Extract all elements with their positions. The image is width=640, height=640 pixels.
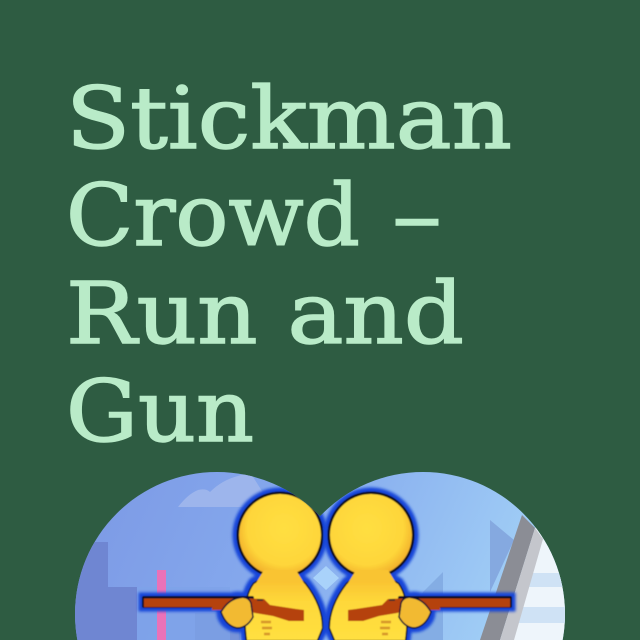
outline of head and body xyxy=(238,493,322,640)
fingers xyxy=(261,622,272,634)
sky xyxy=(70,470,570,640)
figure: right xyxy=(328,492,512,640)
neck xyxy=(256,570,304,583)
neck, right xyxy=(348,570,396,583)
figure: left xyxy=(142,492,324,640)
grey road edge xyxy=(480,515,543,640)
blue glow, right xyxy=(328,492,511,640)
title: Crowd xyxy=(66,167,360,266)
title: Gun xyxy=(66,363,254,462)
rifle xyxy=(142,596,304,621)
cloud xyxy=(178,474,262,507)
pink pole xyxy=(157,570,166,640)
hand xyxy=(221,597,253,628)
outline of head and body, right xyxy=(329,493,413,640)
body xyxy=(246,576,322,640)
cityscape left xyxy=(70,542,240,640)
blue glow xyxy=(143,492,324,640)
cityscape right xyxy=(405,520,514,640)
body, right xyxy=(330,576,406,640)
hand, right xyxy=(399,597,431,628)
snowy stripes xyxy=(500,528,565,640)
title: Stickman xyxy=(66,70,512,169)
heart-shaped game image xyxy=(70,470,580,640)
head, right xyxy=(330,494,412,576)
title: – xyxy=(392,167,442,266)
head xyxy=(239,494,321,576)
title: Run and xyxy=(66,265,464,364)
light gap between figures xyxy=(313,566,339,590)
rifle, right xyxy=(348,596,512,621)
poster xyxy=(70,82,565,640)
title xyxy=(66,70,512,462)
fingers, right xyxy=(380,622,391,634)
